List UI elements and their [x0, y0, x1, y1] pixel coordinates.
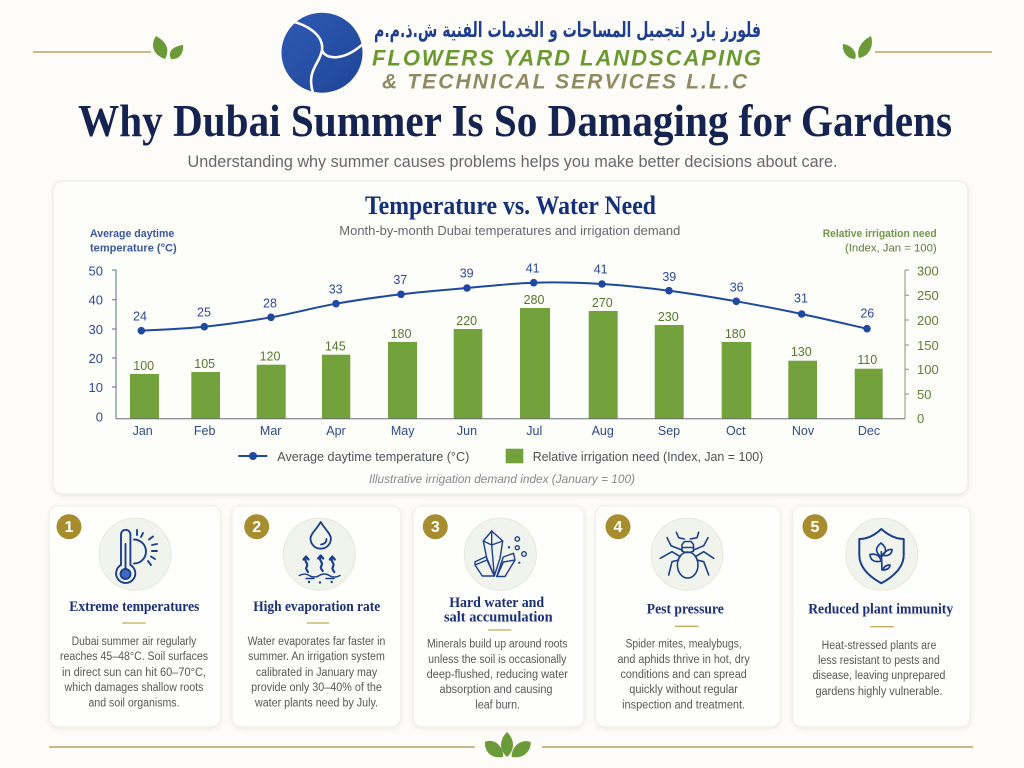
- month labels: Dec: [858, 424, 880, 438]
- panel: card 4 pest pressure: [596, 506, 780, 727]
- heading: Reduced plant immunity: [808, 602, 954, 618]
- month labels: Mar: [260, 424, 281, 438]
- right axis: [905, 263, 939, 426]
- line: average daytime temperature: [138, 279, 871, 335]
- body text: reaches 45–48°C. Soil surfaces: [60, 651, 208, 663]
- left axis: 10: [89, 380, 103, 395]
- right axis: 50: [917, 387, 931, 402]
- heading: Hard water and: [449, 595, 545, 611]
- body text: Water evaporates far faster in: [248, 636, 385, 648]
- heading: salt accumulation: [444, 609, 553, 625]
- number badge 5: [802, 514, 828, 539]
- body text: gardens highly vulnerable.: [816, 686, 942, 698]
- line value labels: 39: [460, 267, 474, 281]
- bars: relative irrigation need: [130, 308, 883, 418]
- legend: Average daytime temperature (°C): [277, 449, 469, 464]
- baseline: [116, 418, 905, 420]
- left axis: 40: [89, 292, 103, 307]
- logo: company name: فلورز يارد لتجميل المساحات و الخدمات الفنية ش.ذ.م.م: [374, 18, 761, 42]
- heading: Pest pressure: [647, 601, 724, 617]
- line value labels: 41: [526, 262, 540, 276]
- left axis: 0: [96, 409, 103, 424]
- right axis: 100: [917, 362, 939, 377]
- line value labels: 25: [197, 305, 211, 319]
- right axis title: (Index, Jan = 100): [845, 242, 937, 254]
- right axis: 200: [917, 313, 939, 328]
- line value labels: 36: [730, 281, 744, 295]
- line value labels: [133, 262, 874, 323]
- left axis: [89, 263, 116, 424]
- line value labels: 26: [860, 307, 874, 321]
- left axis: 20: [89, 351, 103, 366]
- number badge 1: 1: [65, 519, 74, 536]
- right axis: 0: [917, 411, 924, 426]
- header ornament: right line and leaves: [843, 36, 992, 59]
- month labels: May: [391, 424, 415, 438]
- logo: company name: & TECHNICAL SERVICES L.L.C: [382, 70, 748, 93]
- right axis title: [823, 228, 937, 254]
- number badge 4: 4: [614, 519, 623, 536]
- legend: Relative irrigation need (Index, Jan = 100): [533, 449, 763, 464]
- body text: inspection and treatment.: [622, 700, 745, 712]
- body text: [813, 640, 945, 698]
- panel: temperature vs water need chart: [53, 181, 968, 494]
- body text: absorption and causing: [440, 684, 552, 696]
- icon: thermometer and sun: [99, 518, 171, 590]
- body text: leaf burn.: [475, 700, 520, 712]
- month labels: Nov: [792, 424, 815, 438]
- body text: disease, leaving unprepared: [813, 670, 945, 682]
- right axis: 250: [917, 288, 939, 303]
- line value labels: 24: [133, 309, 147, 323]
- panel: card 3 hard water and salt accumulation: [413, 506, 584, 727]
- body text: quickly without regular: [629, 684, 738, 696]
- body text: [248, 636, 385, 710]
- month labels: Jan: [133, 424, 153, 438]
- number badge 4: [606, 514, 630, 539]
- bar value labels: 145: [325, 339, 346, 353]
- heading: Extreme temperatures: [69, 599, 199, 615]
- month labels: Sep: [658, 424, 680, 438]
- icon: salt crystals: [464, 518, 536, 590]
- logo: blue three-lobed mark: [282, 13, 366, 93]
- panel: card 1 extreme temperatures: [49, 506, 220, 727]
- logo: company name: [372, 18, 761, 93]
- body text: summer. An irrigation system: [248, 651, 385, 663]
- month labels: [133, 424, 880, 438]
- left axis title: [90, 228, 177, 254]
- right axis: 300: [917, 263, 939, 278]
- body text: [617, 638, 750, 712]
- month labels: Feb: [194, 424, 216, 438]
- month labels: Jul: [526, 424, 542, 438]
- legend: [238, 449, 763, 464]
- body text: water plants need by July.: [254, 698, 378, 710]
- bar value labels: 180: [391, 327, 411, 341]
- number badge 2: [244, 514, 269, 539]
- heading: [444, 595, 553, 625]
- number badge 3: [423, 514, 448, 539]
- bar value labels: 280: [524, 293, 544, 307]
- left axis title: Average daytime: [90, 228, 174, 240]
- footer ornament: lines and leaves: [49, 732, 973, 757]
- bar value labels: 220: [456, 314, 477, 328]
- bar value labels: 270: [592, 296, 613, 310]
- chart note: Illustrative irrigation demand index (January = 100): [369, 474, 635, 486]
- number badge 5: 5: [811, 519, 820, 536]
- body text: provide only 30–40% of the: [251, 682, 382, 694]
- body text: Heat-stressed plants are: [822, 640, 936, 652]
- bar value labels: 180: [725, 327, 746, 341]
- line value labels: 28: [263, 296, 277, 310]
- line value labels: 37: [393, 273, 407, 287]
- month labels: Oct: [726, 424, 746, 438]
- bar value labels: 110: [857, 353, 877, 367]
- title: Why Dubai Summer Is So Damaging for Gardens: [78, 96, 952, 146]
- heading: High evaporation rate: [253, 599, 381, 615]
- left axis: 50: [89, 263, 103, 278]
- logo: company name: FLOWERS YARD LANDSCAPING: [372, 45, 761, 70]
- body text: calibrated in January may: [256, 667, 377, 679]
- panel: card 5 reduced plant immunity: [793, 506, 970, 727]
- bar value labels: 130: [791, 345, 812, 359]
- bar value labels: [133, 293, 877, 373]
- body text: less resistant to pests and: [818, 655, 940, 667]
- line value labels: 33: [329, 282, 343, 296]
- bar value labels: 100: [133, 359, 154, 373]
- chart subtitle: Month-by-month Dubai temperatures and irrigation demand: [339, 224, 680, 238]
- body text: and soil organisms.: [88, 698, 180, 710]
- bar value labels: 230: [658, 310, 679, 324]
- body text: which damages shallow roots: [64, 682, 204, 694]
- icon: water drop and evaporation: [283, 518, 355, 590]
- line value labels: 39: [662, 270, 676, 284]
- line value labels: 31: [794, 291, 808, 305]
- chart title: Temperature vs. Water Need: [365, 191, 656, 220]
- right axis: 150: [917, 338, 939, 353]
- body text: in direct sun can hit 60–70°C,: [62, 667, 206, 679]
- body text: and aphids thrive in hot, dry: [617, 654, 750, 666]
- bar value labels: 105: [194, 357, 215, 371]
- icon: shield with plant: [846, 518, 918, 590]
- month labels: Jun: [457, 424, 477, 438]
- month labels: Apr: [326, 424, 346, 438]
- body text: unless the soil is occasionally: [428, 654, 567, 666]
- number badge 1: [56, 514, 82, 539]
- body text: conditions and can spread: [620, 669, 747, 681]
- body text: [60, 636, 208, 710]
- subtitle: Understanding why summer causes problems helps you make better decisions about care.: [188, 153, 838, 171]
- line value labels: 41: [594, 262, 608, 276]
- left axis title: temperature (°C): [90, 242, 177, 254]
- panel: card 2 high evaporation rate: [232, 506, 401, 727]
- body text: Spider mites, mealybugs,: [625, 639, 742, 651]
- body text: deep-flushed, reducing water: [427, 669, 568, 681]
- icon: pest insect: [651, 518, 723, 590]
- number badge 2: 2: [252, 519, 261, 536]
- month labels: Aug: [592, 424, 614, 438]
- header ornament: left line and leaves: [33, 36, 183, 59]
- body text: Dubai summer air regularly: [72, 636, 197, 648]
- body text: [427, 638, 568, 712]
- left axis: 30: [89, 322, 103, 337]
- body text: Minerals build up around roots: [427, 639, 568, 651]
- bar value labels: 120: [260, 349, 280, 363]
- right axis title: Relative irrigation need: [823, 228, 937, 240]
- number badge 3: 3: [431, 519, 440, 536]
